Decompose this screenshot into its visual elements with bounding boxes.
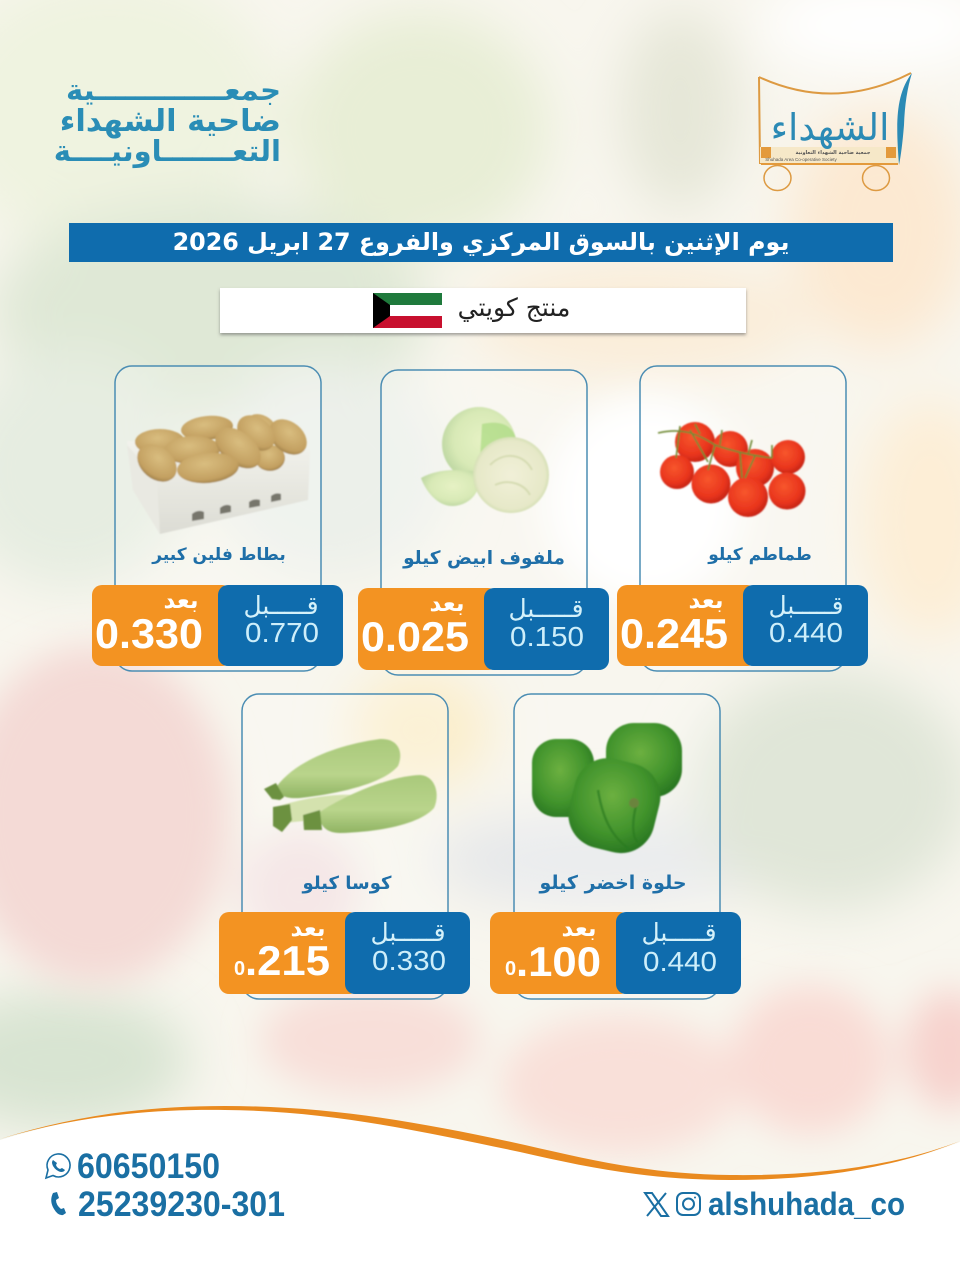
price: before [345,912,470,994]
price: after: .215 [245,937,330,984]
product card: green pepper [490,694,741,999]
price: after: بعد [164,588,198,614]
product card: white cabbage [358,370,609,675]
logo: shopping cart [759,73,912,190]
price: before: قـــــبل [370,918,446,947]
Kuwaiti product label [220,288,746,333]
product card: potatoes: بطاط فلين كبير [151,545,286,565]
Kuwaiti product label: منتج كويتي [458,293,570,323]
price: after: بعد [689,588,723,614]
price: after [617,585,757,666]
social handle: alshuhada_co [708,1186,905,1222]
organisation name: ضاحية الشهداء [60,104,281,139]
icon: WhatsApp [46,1154,70,1178]
price: after: .100 [516,938,601,985]
price: after [490,912,630,994]
icon: Kuwait flag [373,293,442,328]
image: cabbage [421,407,549,513]
product card: tomatoes: طماطم كيلو [707,545,812,565]
price: before: قـــــبل [641,918,717,947]
product card: tomatoes [617,366,868,671]
price: before: قـــــبل [768,591,844,620]
price: before: 0.330 [372,945,446,976]
product card: green pepper: حلوة اخضر كيلو [538,872,687,894]
image: green peppers [532,723,682,860]
organisation name: جمعـــــــــــــية [66,73,281,107]
price: after [219,912,359,994]
price: before: قـــــبل [508,594,584,623]
price: before [484,588,609,670]
footer wave [0,1106,960,1280]
price: after: بعد [562,916,596,942]
icon: X [645,1193,668,1216]
organisation name: التعـــــــاونيــــة [54,134,281,168]
image: zucchini [264,739,437,833]
date banner: يوم الإثنين بالسوق المركزي والفروع 27 ابريل 2026 [173,228,789,256]
price: after: بعد [430,591,464,617]
price: after: 0.245 [620,610,728,657]
price: before: 0.770 [245,617,319,648]
product card: potatoes [92,366,343,671]
price: after: 0.025 [361,613,469,660]
organisation name [54,73,281,168]
price: before [743,585,868,666]
product card: white cabbage: ملفوف ابيض كيلو [402,548,565,569]
price: before [616,912,741,994]
price: before [218,585,343,666]
logo: shopping cart: جمعية ضاحية الشهداء التعاونية [796,150,871,156]
icon: phone [51,1192,66,1215]
product card: zucchini: كوسا كيلو [302,873,392,894]
icon: Instagram [677,1193,700,1215]
price: before: قـــــبل [243,591,319,620]
price: after: 0 [505,958,516,980]
date banner [69,223,893,262]
price: after: 0 [234,958,245,980]
price: after: بعد [291,916,325,942]
price: after: 0.330 [95,610,203,657]
logo: shopping cart: Shuhada Area Co-operative Society [765,157,838,162]
price: before: 0.440 [769,617,843,648]
image: potatoes in foam box [127,408,314,534]
price: before: 0.150 [510,621,584,652]
contact: phone number: 25239230-301 [78,1185,285,1224]
price: before: 0.440 [643,946,717,977]
image: cherry tomatoes [658,422,806,517]
logo: shopping cart: الشهداء [771,106,889,149]
product card: zucchini [219,694,470,999]
price: after [92,585,232,666]
price: after [358,588,498,670]
contact: WhatsApp number: 60650150 [77,1147,220,1186]
